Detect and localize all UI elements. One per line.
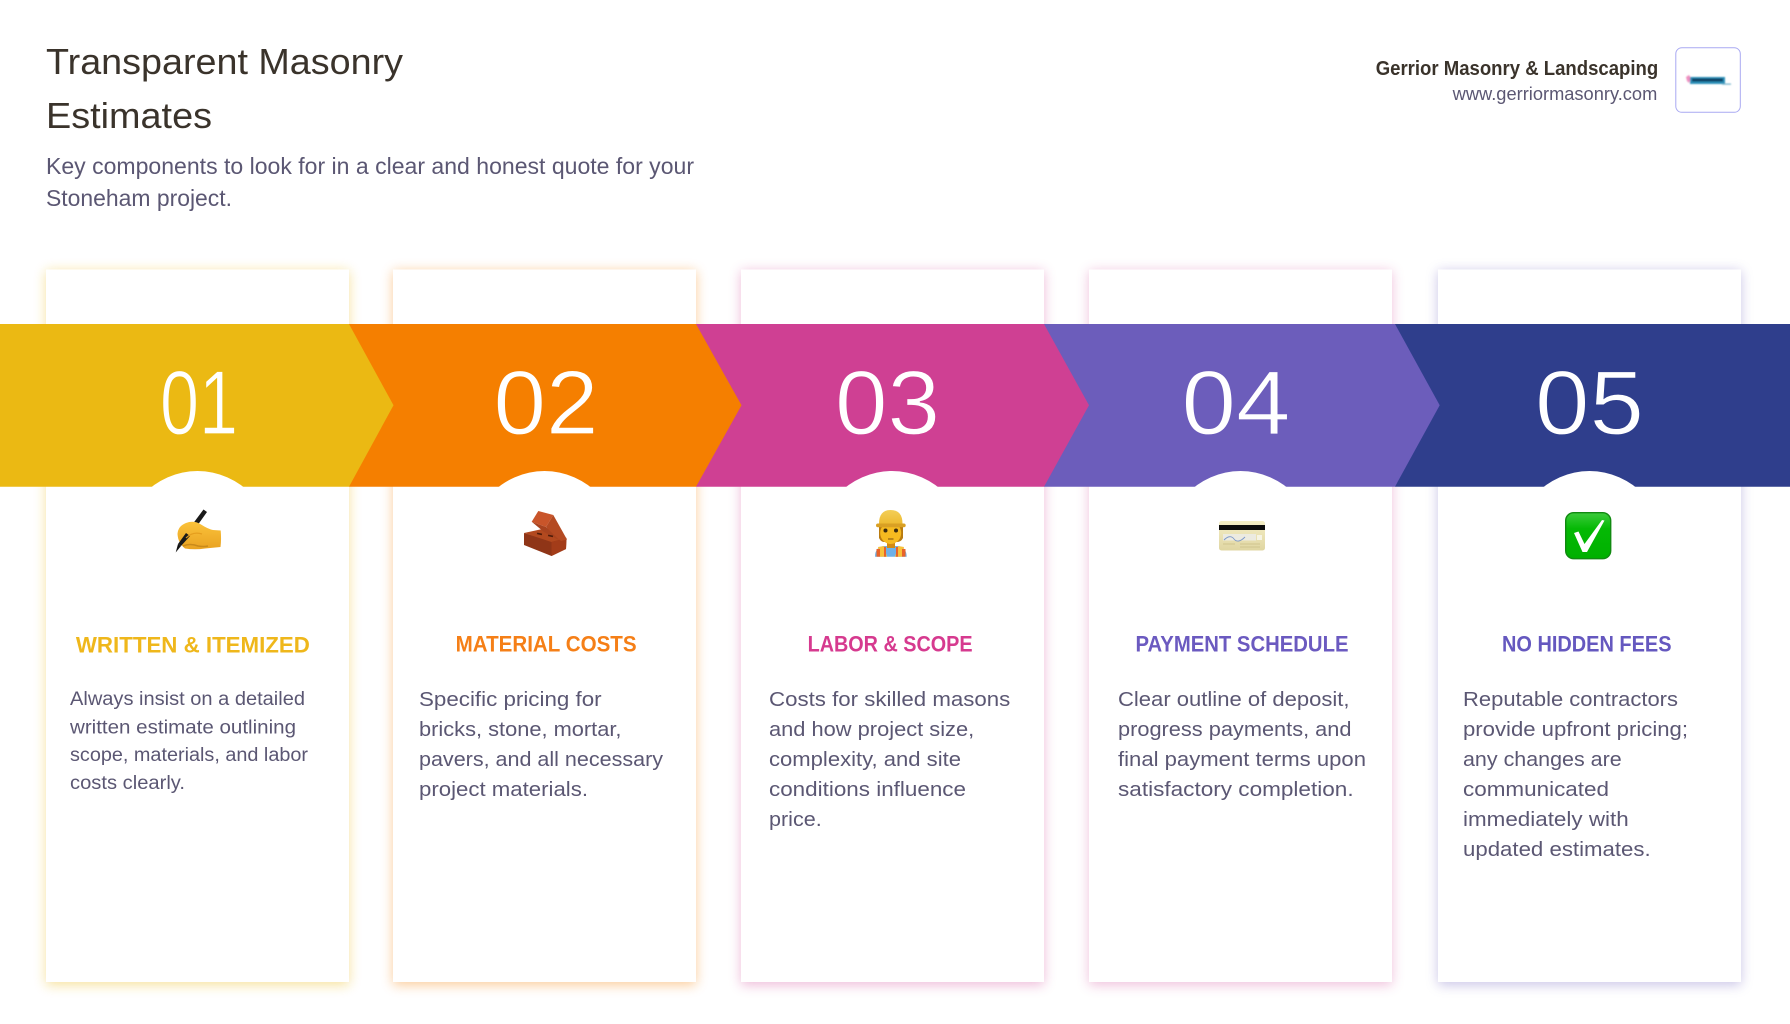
subtitle [46, 153, 694, 211]
step number 05: 05 [1535, 353, 1644, 454]
arrow band: chevron segments [0, 324, 1790, 487]
panel text: no hidden fees: Reputable contractors [1463, 688, 1678, 711]
title: Estimates [46, 95, 212, 136]
panel text: material costs: Specific pricing for [419, 688, 602, 711]
panel: card 4 background [1089, 270, 1392, 985]
panel: card 3 background [741, 270, 1044, 985]
panel text: payment schedule: Clear outline of deposit, [1118, 688, 1350, 711]
panel text: written and itemized [69, 633, 310, 794]
panel text: labor and scope: and how project size, [769, 718, 974, 741]
panel text: no hidden fees: communicated [1463, 778, 1609, 801]
icon: construction worker [875, 510, 907, 557]
panel text: no hidden fees: immediately with [1463, 808, 1629, 831]
icon: bricks [524, 511, 567, 556]
subtitle: Stoneham project. [46, 185, 232, 211]
panel text: no hidden fees: updated estimates. [1463, 838, 1651, 861]
panel text: written and itemized: scope, materials, and labor [70, 745, 309, 766]
panel: card 5 background [1438, 270, 1741, 985]
panel text: material costs: pavers, and all necessary [419, 748, 664, 771]
panel text: no hidden fees: any changes are [1463, 748, 1622, 771]
panel text: material costs: bricks, stone, mortar, [419, 718, 622, 741]
icon: writing hand [176, 510, 221, 552]
panel: card 2 background [393, 270, 696, 985]
title [46, 41, 403, 136]
panel text: written and itemized: WRITTEN & ITEMIZED [76, 633, 310, 658]
panel text: no hidden fees: provide upfront pricing; [1463, 718, 1688, 741]
panel: card 1 background [46, 270, 349, 985]
panel text: payment schedule: PAYMENT SCHEDULE [1136, 632, 1348, 657]
panel text: material costs: project materials. [419, 778, 588, 801]
panel text: no hidden fees: NO HIDDEN FEES [1502, 632, 1672, 657]
company name and website: Gerrior Masonry & Landscaping [1376, 58, 1658, 80]
panel text: written and itemized: written estimate outlining [69, 717, 296, 738]
step number 01: 01 [160, 353, 238, 454]
panel text: labor and scope: complexity, and site [769, 748, 961, 771]
panel text: payment schedule: progress payments, and [1118, 718, 1352, 741]
step number 04: 04 [1182, 353, 1290, 454]
panel text: no hidden fees [1463, 632, 1688, 861]
panel text: labor and scope: Costs for skilled masons [769, 688, 1010, 711]
panel text: labor and scope: LABOR & SCOPE [808, 632, 973, 657]
company name and website: www.gerriormasonry.com [1452, 84, 1657, 104]
panel text: material costs: MATERIAL COSTS [456, 632, 637, 657]
step number 03: 03 [835, 353, 940, 454]
panel text: payment schedule [1118, 632, 1366, 801]
company name and website [1376, 58, 1658, 104]
title: Transparent Masonry [46, 41, 403, 82]
panel text: payment schedule: satisfactory completion. [1118, 778, 1354, 801]
panel text: written and itemized: costs clearly. [70, 773, 185, 794]
panel text: payment schedule: final payment terms upon [1118, 748, 1366, 771]
panel text: labor and scope: price. [769, 808, 822, 831]
panel text: labor and scope [769, 632, 1010, 831]
subtitle: Key components to look for in a clear and honest quote for your [46, 153, 694, 179]
panel text: material costs [419, 632, 664, 801]
circular notches under the band [120, 471, 1668, 637]
company logo box [1676, 48, 1740, 112]
icon: credit card [1219, 521, 1265, 550]
panel text: written and itemized: Always insist on a detailed [70, 689, 305, 710]
step number 02: 02 [494, 353, 598, 454]
panel text: labor and scope: conditions influence [769, 778, 966, 801]
icon: check mark [1566, 513, 1611, 559]
